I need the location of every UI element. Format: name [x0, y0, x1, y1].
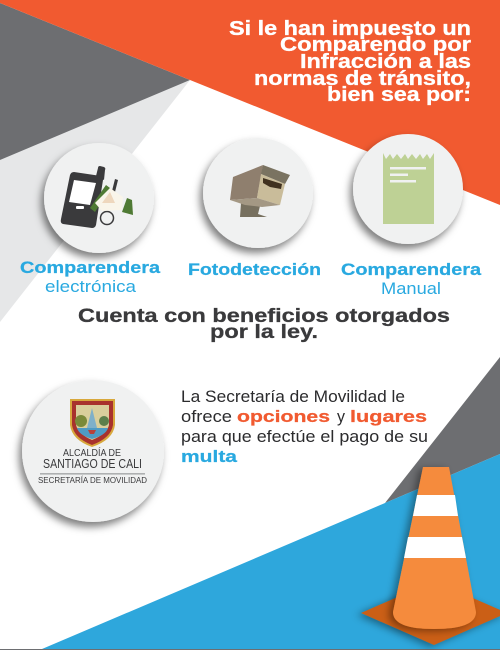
- icon: handheld device and hand: [61, 166, 133, 228]
- label: comparendera electronica: electrónica: [45, 278, 137, 296]
- text block: payment options: ofrece: [181, 408, 232, 426]
- title: Si le han impuesto un: [229, 18, 471, 40]
- text block: payment options: [181, 388, 428, 466]
- label: comparendera electronica: [20, 259, 161, 296]
- panel: comparendera manual: [341, 134, 482, 298]
- text: alcaldia de santiago de cali: SECRETARÍA DE MOVILIDAD: [38, 476, 147, 485]
- heading: benefits: por la ley.: [210, 321, 318, 343]
- label: fotodeteccion: Fotodetección: [188, 261, 321, 279]
- title: bien sea por:: [327, 84, 471, 106]
- text: alcaldia de santiago de cali: ALCALDÍA DE: [63, 446, 121, 459]
- label: comparendera electronica: Comparendera: [20, 259, 161, 277]
- text block: payment options: multa: [181, 448, 238, 466]
- heading: benefits: [78, 305, 450, 343]
- text block: payment options: lugares: [350, 408, 427, 426]
- icon: coat of arms: [70, 399, 115, 447]
- title: Comparendo por: [280, 34, 471, 56]
- panel: fotodeteccion: [188, 138, 321, 279]
- title: normas de tránsito,: [254, 68, 471, 90]
- text block: payment options: La Secretaría de Movilidad le: [181, 388, 405, 406]
- text block: payment options: y: [337, 408, 346, 426]
- icon: traffic camera: [230, 165, 290, 217]
- icon: paper ticket: [383, 153, 434, 224]
- text block: payment options: opciones: [237, 408, 330, 426]
- label: comparendera manual: Comparendera: [341, 261, 482, 279]
- label: comparendera manual: Manual: [381, 280, 441, 298]
- text: alcaldia de santiago de cali: [38, 446, 147, 485]
- panel: comparendera electronica: [20, 143, 161, 296]
- title: Infracción a las: [300, 51, 471, 73]
- text block: payment options: para que efectúe el pago de su: [181, 428, 428, 446]
- title: [229, 18, 471, 106]
- text: alcaldia de santiago de cali: SANTIAGO DE CALI: [43, 457, 142, 471]
- heading: benefits: Cuenta con beneficios otorgados: [78, 305, 450, 327]
- label: comparendera manual: [341, 261, 482, 298]
- icon: traffic cone: [361, 467, 500, 645]
- panel: logo alcaldia: [22, 380, 164, 522]
